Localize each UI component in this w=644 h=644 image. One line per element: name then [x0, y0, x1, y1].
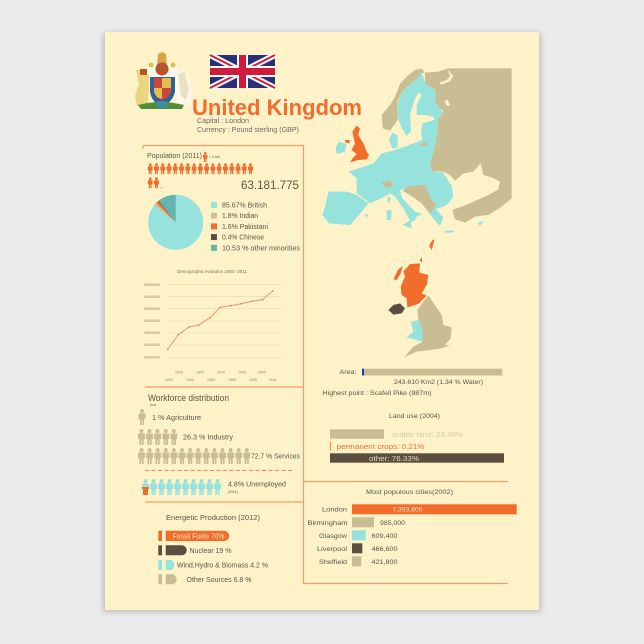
- cities bar chart: [308, 504, 517, 566]
- line chart: demographic evolution: 55000000: [144, 307, 160, 311]
- Baltic Sea: [398, 92, 434, 147]
- Kaliningrad: [418, 143, 428, 146]
- population figure: 63.181.775: [241, 178, 299, 192]
- line chart: demographic evolution: 2000: [258, 370, 266, 374]
- line chart: demographic evolution: [144, 269, 282, 382]
- population pictogram: [148, 163, 253, 188]
- cities bar chart: London: [322, 507, 347, 514]
- line chart: demographic evolution: 1953: [207, 378, 215, 382]
- dashed divider: [145, 470, 294, 472]
- unemployment pictogram: [142, 479, 221, 495]
- Ireland: [336, 142, 347, 154]
- land use heading: Land use (2004): [389, 413, 440, 420]
- Balkans: [402, 185, 437, 213]
- land use bars: other: 76.33%: [369, 454, 419, 463]
- energy heading: Energetic Production (2012): [166, 513, 261, 522]
- poster background: [105, 32, 539, 610]
- cities bar chart: Glasgow: [319, 533, 347, 540]
- unemployment label: (2011): [228, 490, 238, 494]
- energy bars: Fossil Fuels 70%: [172, 532, 225, 540]
- England: [404, 296, 452, 357]
- cities heading: Most populous cities(2002): [366, 489, 453, 496]
- line chart: demographic evolution: 1940: [186, 378, 194, 382]
- land use bars: arable land: 23.46%: [392, 430, 463, 439]
- Europe map: [322, 68, 512, 247]
- area bar: Area:: [340, 369, 357, 376]
- line chart: demographic evolution: 65000000: [144, 283, 160, 287]
- Switzerland: [381, 180, 393, 188]
- capital and currency: [197, 116, 299, 134]
- line chart: demographic evolution: Demographic evolution 1900 -2011: [177, 269, 247, 274]
- flag: [210, 55, 275, 88]
- workforce heading: 2011: [150, 403, 157, 407]
- population heading: Population (2011): [147, 151, 202, 160]
- line chart: demographic evolution: 1990: [238, 370, 246, 374]
- area bar: [340, 369, 502, 386]
- Wales: [407, 320, 423, 342]
- pie legend: [211, 200, 300, 252]
- cities bar chart: 421,800: [372, 559, 398, 566]
- pie legend: 1.6% Pakistani: [222, 222, 268, 231]
- land use bars: permanent crops: 0.21%: [336, 442, 425, 451]
- energy bars: [158, 531, 269, 584]
- population heading: = 3 mil.: [209, 155, 220, 159]
- line chart: demographic evolution: 1947: [196, 370, 204, 374]
- unemployment label: [228, 480, 286, 494]
- United Kingdom: [345, 126, 434, 247]
- energy bars: Wind,Hydro & Biomass 4.2 %: [177, 560, 269, 570]
- line chart: demographic evolution: 2011: [269, 378, 277, 382]
- line chart: demographic evolution: 60000000: [144, 295, 160, 299]
- workforce heading: Workforce distribution: [148, 393, 229, 403]
- Denmark: [389, 133, 398, 148]
- line chart: demographic evolution: 1970: [217, 370, 225, 374]
- energy bars: Other Sources 6.8 %: [186, 575, 252, 584]
- cities bar chart: Birmingham: [308, 520, 348, 527]
- line chart: demographic evolution: 1920: [175, 370, 183, 374]
- pie chart: [148, 195, 203, 250]
- line chart: demographic evolution: 50000000: [144, 319, 160, 323]
- line chart: demographic evolution: 1980: [228, 378, 236, 382]
- cities bar chart: Sheffield: [319, 559, 347, 566]
- cities bar chart: 609,400: [372, 533, 398, 540]
- pie legend: 0.4% Chinese: [222, 233, 264, 242]
- population heading: [147, 151, 220, 162]
- capital and currency: Currency : Pound sterling (GBP): [197, 125, 299, 134]
- title: United Kingdom: [192, 95, 362, 120]
- area bar: 243.610 Km2 (1.34 % Water): [394, 379, 483, 386]
- workforce labels: 1 % Agriculture: [152, 413, 201, 422]
- land use bars: [330, 429, 504, 463]
- Iberia: [322, 192, 368, 225]
- workforce heading: [148, 393, 229, 407]
- pie legend: 10.53 % other minorities: [222, 243, 300, 252]
- pie legend: 85.67% British: [222, 200, 267, 210]
- line chart: demographic evolution: 35000000: [144, 356, 160, 360]
- Northern Ireland: [388, 303, 405, 315]
- Norway: [382, 69, 425, 131]
- line chart: demographic evolution: 1900: [165, 378, 173, 382]
- White Sea and lakes: [437, 70, 453, 114]
- panel frame lines: [143, 146, 508, 584]
- coat of arms: [135, 52, 192, 109]
- line chart: demographic evolution: 45000000: [144, 331, 160, 335]
- highest point: Highest point : Scafell Pike (987m): [322, 390, 432, 397]
- workforce pictograms: [138, 409, 250, 464]
- cities bar chart: 985,000: [380, 520, 405, 527]
- line chart: demographic evolution: 1995: [249, 378, 257, 382]
- cities bar chart: Liverpool: [317, 546, 348, 553]
- energy bars: Nuclear 19 %: [190, 546, 232, 555]
- workforce labels: 26.3 % Industry: [183, 432, 233, 442]
- non-EU territory: [425, 68, 512, 223]
- Shetland: [429, 240, 434, 250]
- workforce labels: 72.7 % Services: [251, 452, 300, 460]
- Mediterranean islands: [365, 197, 484, 233]
- workforce labels: [152, 413, 300, 460]
- UK regions map: [388, 240, 452, 357]
- unemployment label: 4.8% Unemployed: [228, 480, 286, 488]
- EU member states: [348, 73, 453, 228]
- cities bar chart: 466,600: [372, 546, 398, 553]
- cities bar chart: 7,393,800: [392, 507, 423, 514]
- Scotland: [393, 257, 428, 307]
- pie legend: 1.8% Indian: [222, 211, 258, 220]
- line chart: demographic evolution: 40000000: [144, 343, 160, 347]
- capital and currency: Capital : London: [197, 116, 249, 125]
